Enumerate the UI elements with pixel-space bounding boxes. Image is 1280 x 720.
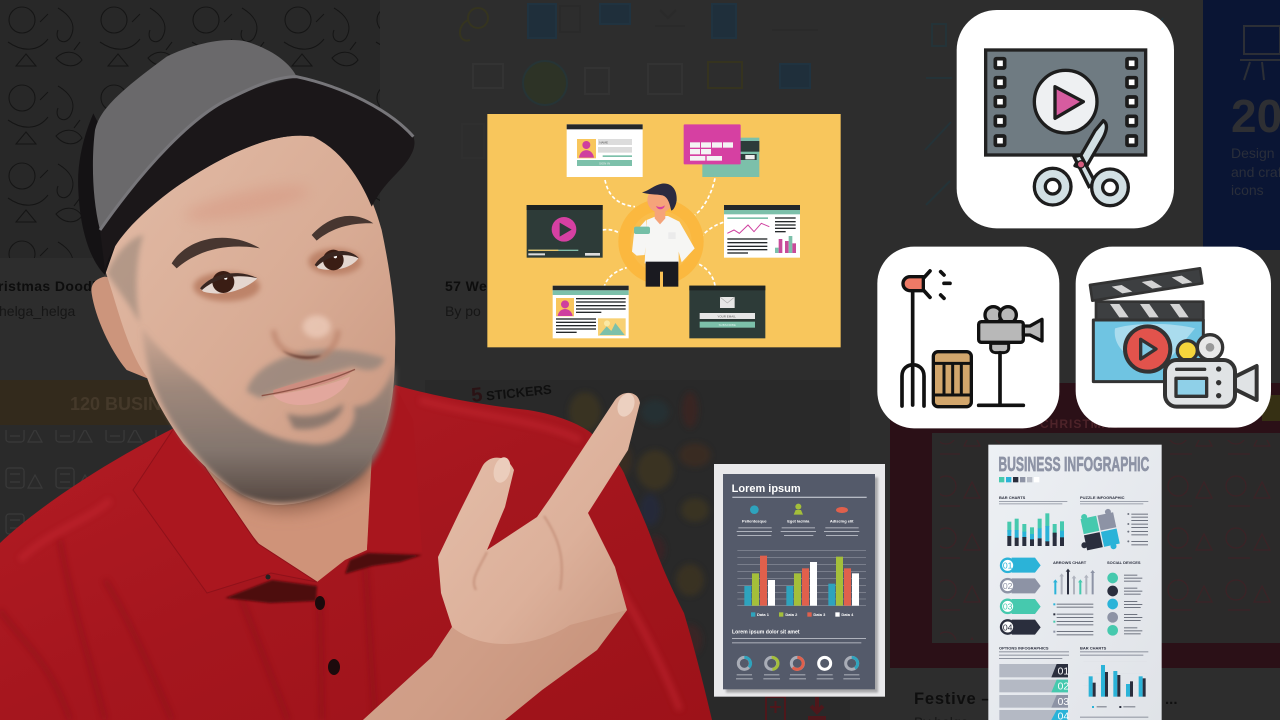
card caption: festive: Festive — — [914, 690, 999, 708]
social device circles — [1107, 573, 1142, 636]
chart legend: Data 4 — [841, 612, 854, 617]
chart legend — [751, 612, 854, 617]
grouped bar chart — [737, 550, 866, 606]
panel: navy promo: Design — [1231, 145, 1275, 161]
section headings: BAR CHARTS — [999, 495, 1026, 500]
window: video player — [527, 205, 603, 258]
window: line and bar chart — [724, 205, 800, 258]
panel: navy promo: icons — [1231, 182, 1264, 198]
window: email subscribe — [689, 286, 765, 338]
window: sign in: SIGN IN — [599, 161, 610, 165]
panel: yellow web diagram — [487, 114, 841, 347]
icon tile: clapperboard and camera — [1076, 247, 1271, 428]
poster heading: Lorem ipsum — [732, 483, 801, 495]
infographic: Business infographic poster — [988, 445, 1162, 720]
three feature columns — [737, 504, 859, 536]
panel: business icons: 120 BUSINESS — [70, 394, 197, 414]
cap brim — [100, 77, 414, 270]
card caption: web icons: 57 We — [445, 278, 487, 294]
face — [105, 136, 395, 505]
three feature columns: Eget lacinia — [787, 519, 810, 524]
collar shadow and buttons — [225, 553, 422, 675]
collar left — [133, 428, 317, 593]
window: email subscribe: YOUR EMAIL — [717, 314, 736, 318]
nose — [273, 315, 338, 359]
window: sign in — [567, 124, 643, 177]
section headings: ARROWS CHART — [1053, 560, 1087, 565]
window: email subscribe: SUBSCRIBE — [719, 323, 736, 327]
three feature columns: Pellentesque — [742, 519, 767, 524]
puzzle graphic — [1075, 508, 1148, 556]
arrow column chart — [1053, 569, 1095, 635]
numbered arrow list: 04 — [1003, 622, 1013, 632]
panel: christmas icon set: CHRISTMAS — [1040, 417, 1120, 431]
window: profile article — [553, 286, 629, 338]
panel: christmas icon set — [890, 383, 1280, 668]
neck shadow under chin — [200, 440, 372, 512]
panel: stickers: 5 STICKERS — [470, 377, 553, 407]
card caption: doodles: helga_helga — [0, 303, 76, 319]
numbered arrow list: 02 — [1003, 581, 1013, 591]
icon tile: film set lamp, crate and camera — [877, 247, 1059, 428]
card caption: web icons: By po — [445, 303, 481, 319]
collar right — [367, 385, 422, 552]
brim edge highlight — [100, 77, 413, 230]
chart legend: Data 1 — [757, 612, 770, 617]
poster subheading — [732, 630, 866, 643]
section headings — [999, 495, 1141, 650]
head and face — [91, 136, 395, 505]
card caption: festive: ... — [1165, 691, 1178, 708]
section headings: SOCIAL DEVICES — [1107, 560, 1141, 565]
numbered arrow list — [1001, 558, 1041, 635]
numbered arrow list: 01 — [1003, 561, 1013, 571]
shirt — [0, 385, 712, 720]
moustache — [247, 349, 385, 398]
bottom add and save buttons — [766, 697, 826, 720]
neck — [195, 440, 375, 582]
infographic: Lorem ipsum poster — [714, 464, 885, 697]
window: payment card — [684, 124, 759, 177]
figure: presenter — [618, 184, 704, 287]
options rows: 02 — [1058, 682, 1069, 693]
chart legend: Data 2 — [785, 612, 798, 617]
poster heading — [732, 483, 867, 498]
forehead tone — [182, 178, 311, 228]
arrows: dashed connectors — [603, 178, 723, 288]
poster subheading: Lorem ipsum dolor sit amet — [732, 630, 800, 636]
cap mesh back — [78, 113, 118, 275]
stacked bar chart — [999, 501, 1148, 546]
person: man in cap pointing — [0, 40, 712, 720]
colour swatches — [999, 477, 1039, 482]
donut row — [736, 657, 860, 679]
icon tile: film with scissors — [957, 10, 1174, 228]
options rows — [999, 651, 1148, 720]
card caption: doodles — [0, 278, 113, 319]
window: sign in: NAME — [599, 140, 608, 144]
temple stubble — [107, 235, 143, 323]
panel: navy promo — [1203, 0, 1280, 250]
soul patch — [287, 403, 343, 429]
cap — [78, 40, 414, 275]
ear — [91, 277, 147, 378]
card caption: festive — [914, 690, 1178, 720]
section headings: BAR CHARTS — [1080, 645, 1107, 650]
panel: stickers — [425, 377, 850, 720]
right eye — [308, 248, 362, 275]
card caption: doodles: ristmas Doodles — [0, 278, 113, 294]
section headings: OPTIONS INFOGRAPHICS — [999, 645, 1049, 650]
left eye — [193, 271, 260, 301]
options rows: 01 — [1058, 666, 1069, 677]
three feature columns: Adiscing elit — [830, 519, 854, 524]
card caption: web icons — [445, 278, 487, 319]
panel: web icons — [460, 4, 818, 158]
options rows: 03 — [1058, 697, 1069, 708]
poster title: BUSINESS INFOGRAPHIC — [998, 454, 1149, 476]
jaw stubble — [142, 327, 395, 503]
chart legend: Data 3 — [813, 612, 826, 617]
numbered arrow list: 03 — [1003, 602, 1013, 612]
hand pointing up — [363, 391, 640, 720]
paired bar chart — [1080, 662, 1148, 718]
panel: doodle thumbnail — [0, 0, 380, 258]
panel: business icons — [0, 380, 200, 720]
mouth — [262, 369, 355, 405]
brows — [172, 216, 373, 268]
panel: design icons column — [925, 18, 1163, 205]
section headings: PUZZLE INFOGRAPHIC — [1080, 495, 1125, 500]
cap crown — [93, 40, 297, 230]
